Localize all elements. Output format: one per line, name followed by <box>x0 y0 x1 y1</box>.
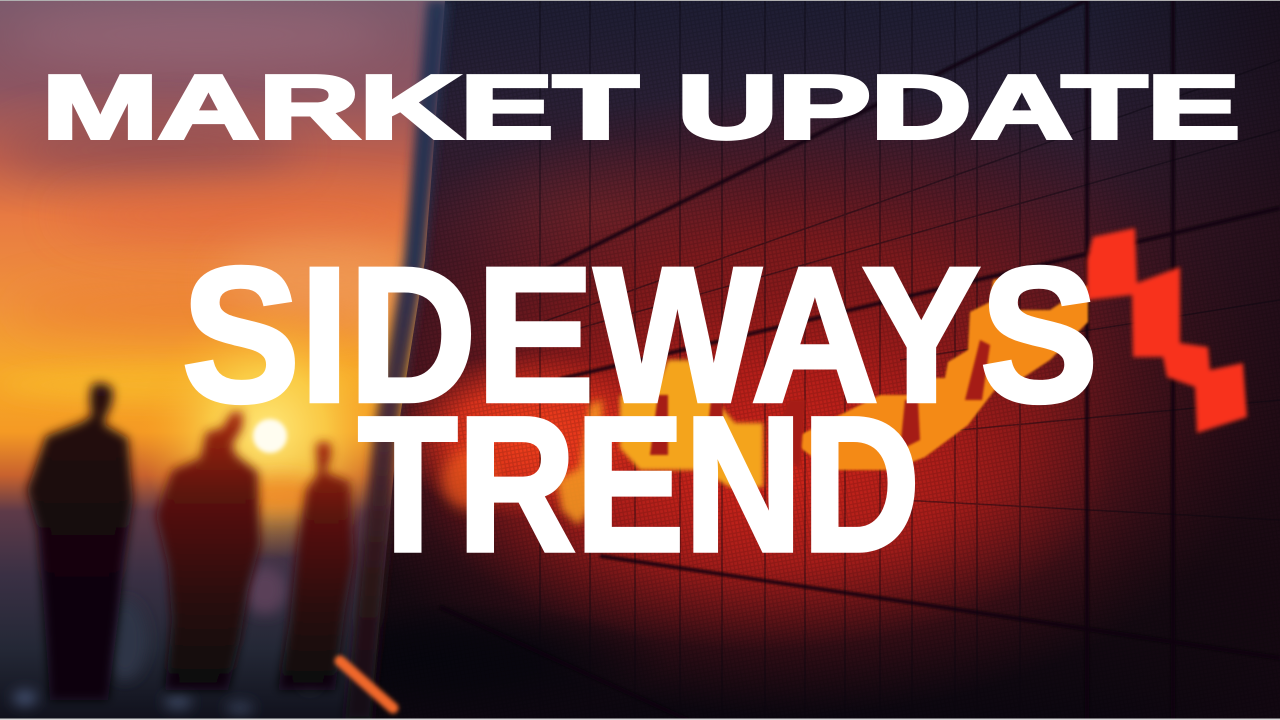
headline: sideways trend <box>182 227 1098 592</box>
orange light streak <box>340 661 393 708</box>
sun <box>253 419 287 453</box>
heading: market update: MARKET UPDATE <box>42 58 1240 158</box>
headline line 2: TREND <box>358 376 920 592</box>
grid lines <box>440 0 1280 720</box>
LED screen panel <box>370 1 1280 718</box>
person left <box>27 383 133 700</box>
stepped price line: falling red section <box>1087 228 1247 433</box>
headline line 1: SIDEWAYS <box>182 227 1098 442</box>
stepped price line: sideways section <box>442 276 1088 525</box>
silhouettes of three people <box>27 383 354 700</box>
city lights at bottom <box>13 566 324 713</box>
person right <box>278 442 354 690</box>
sunset sky background <box>0 0 470 720</box>
pillar between sky and screen <box>345 0 449 720</box>
person centre <box>156 412 260 690</box>
